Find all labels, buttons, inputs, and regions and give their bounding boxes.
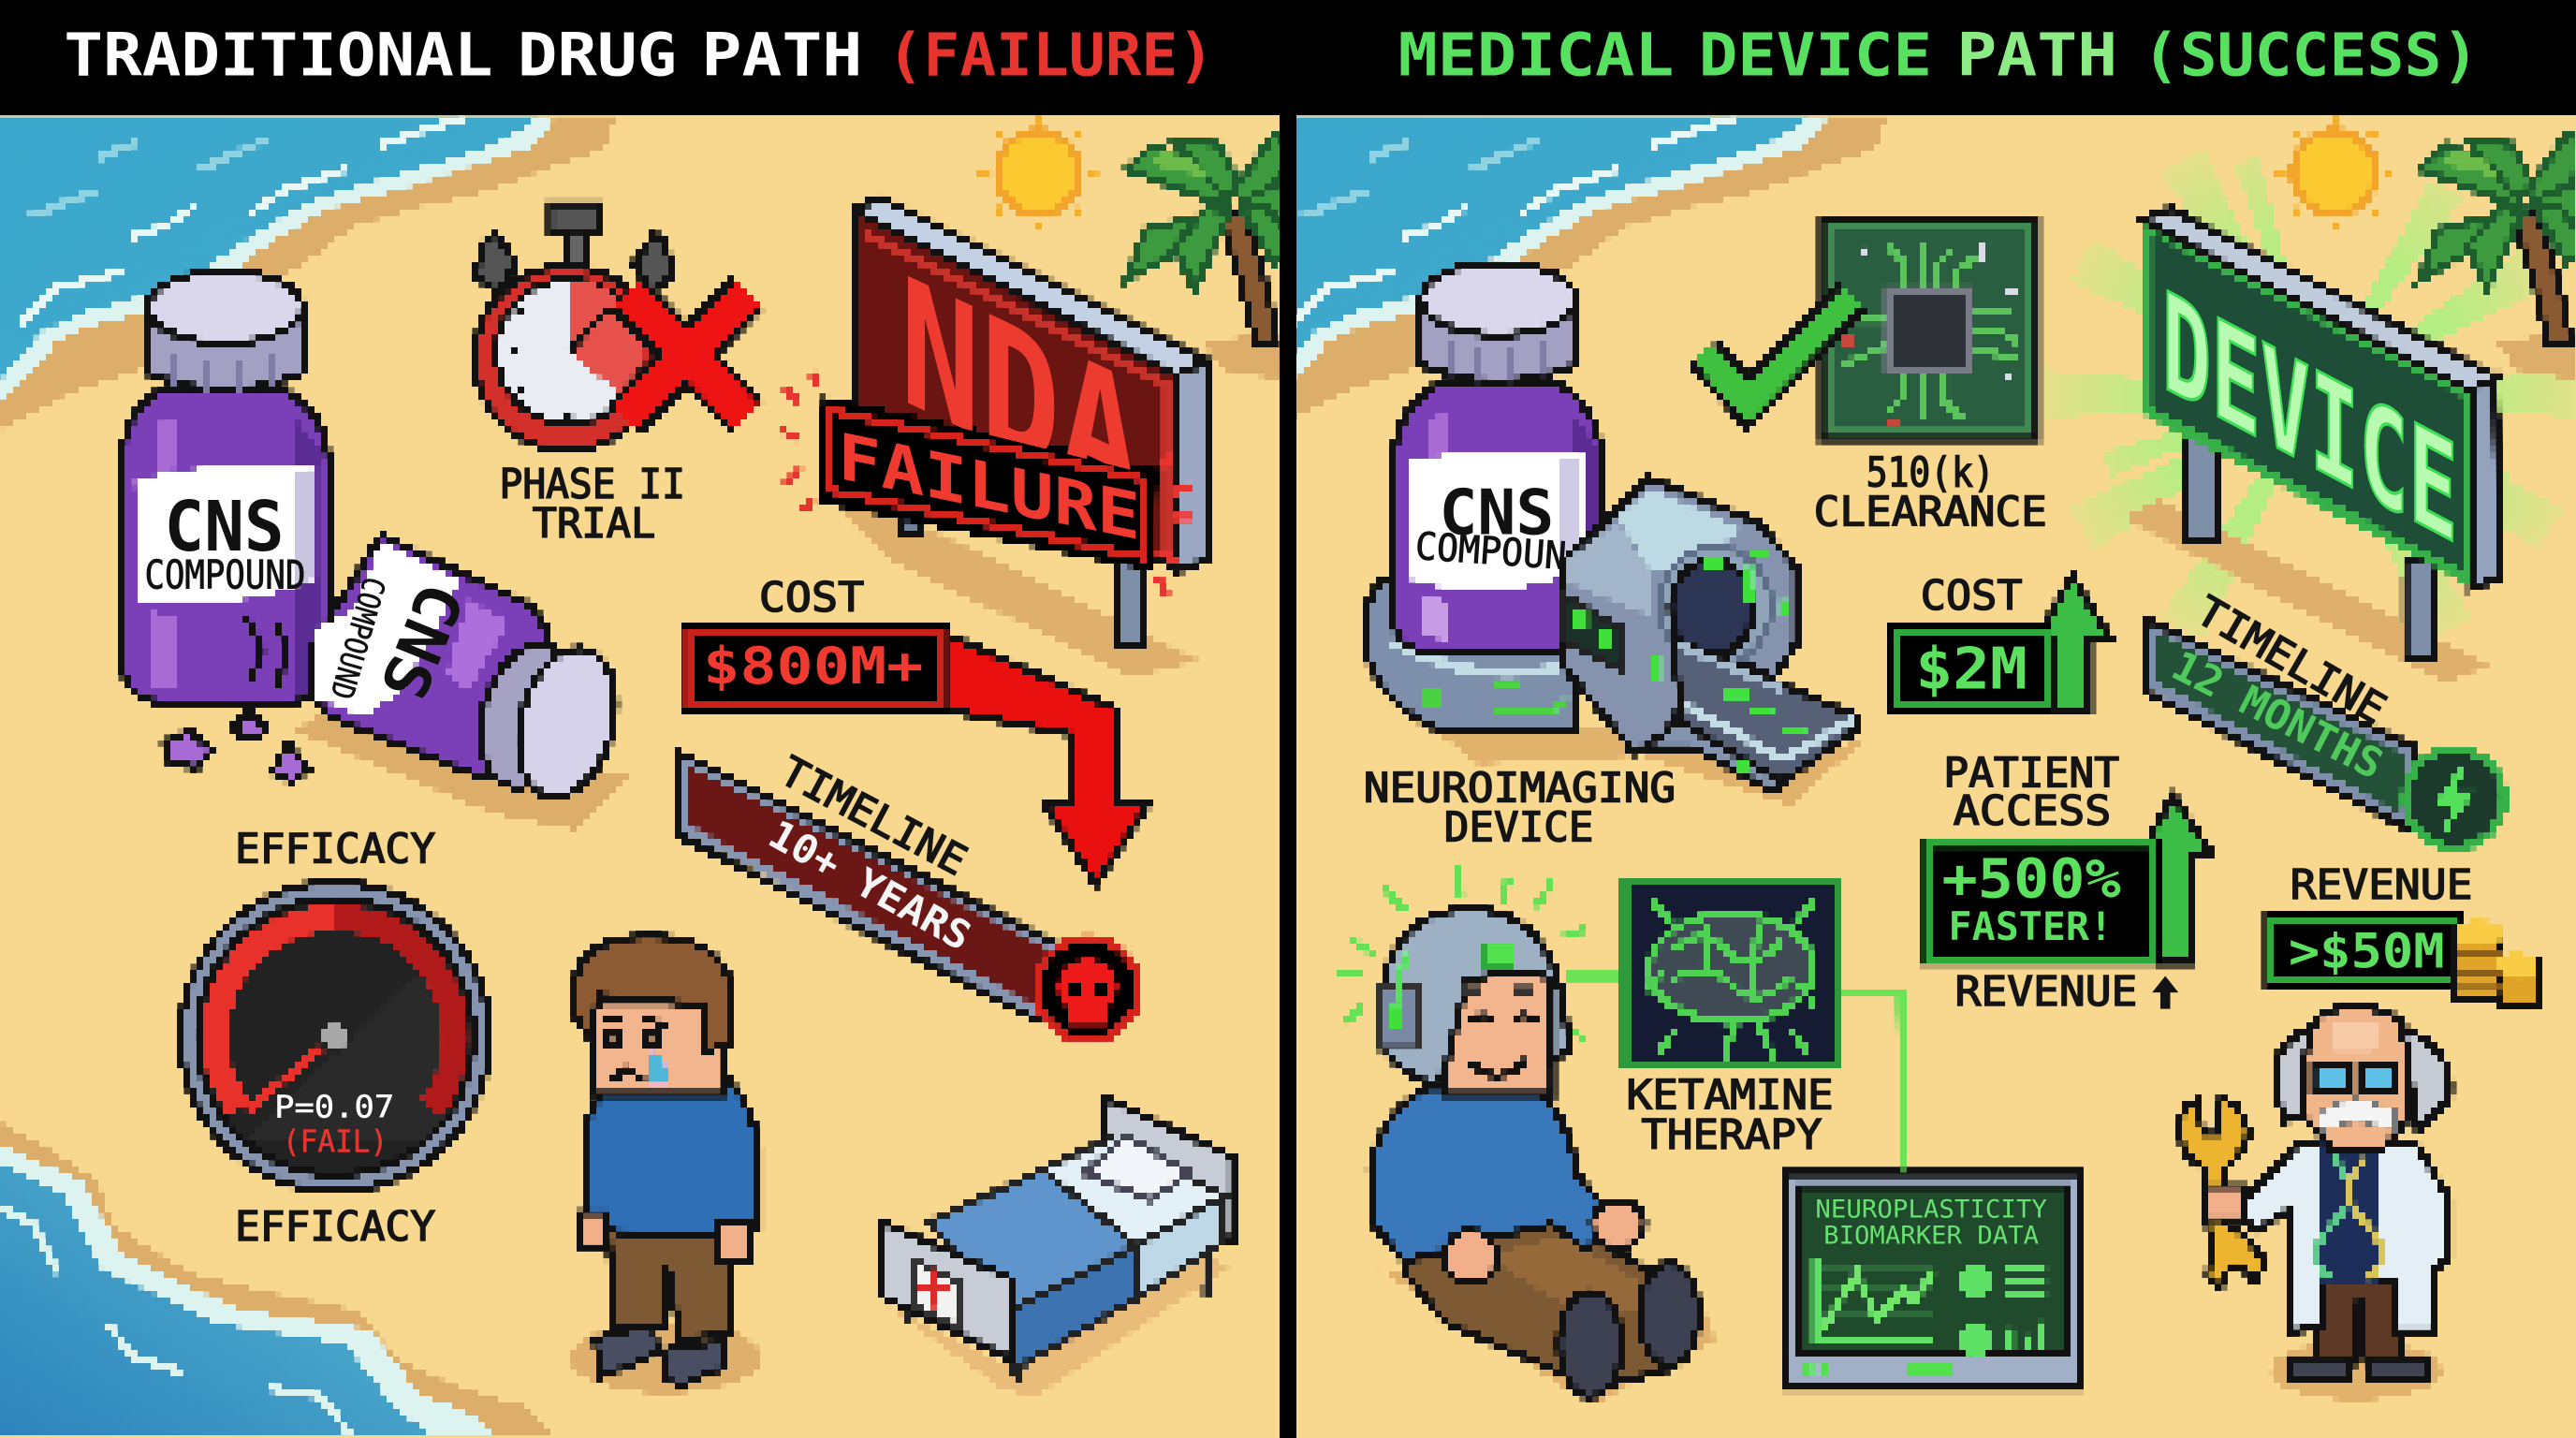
title: traditional drug path (failure): TRADITIONAL [64, 21, 493, 90]
icon: intact CNS bottle [122, 271, 329, 703]
icon: bottle on scanner base [1365, 263, 1865, 805]
value box: revenue [2264, 912, 2465, 990]
title: medical device path (success): PATH [1956, 21, 2117, 90]
title: medical device path (success) [1398, 21, 2479, 90]
label: neuroplasticity biomarker data: BIOMARKER DATA [1823, 1223, 2039, 1251]
value: +500% faster: FASTER! [1949, 903, 2113, 949]
label: bottle CNS COMPOUND: COMPOUN [1413, 524, 1568, 579]
label: neuroplasticity biomarker data: NEUROPLASTICITY [1815, 1196, 2047, 1225]
label: NDA on billboard: NDA [900, 239, 1140, 553]
gauge: efficacy [181, 882, 490, 1191]
figure: sad patient [570, 936, 761, 1393]
value: +500% faster: +500% [1942, 846, 2121, 910]
value: $800M+: $800M+ [703, 637, 923, 696]
value box: +500% faster [1919, 795, 2211, 966]
value: P=0.07: P=0.07 [274, 1088, 394, 1124]
timeline bar with skull [677, 753, 1138, 1040]
value: 10+ years: 10+ YEARS [761, 811, 979, 960]
panel: traditional drug path [0, 113, 1314, 1438]
label: revenue up: REVENUE [1955, 968, 2137, 1016]
label: bottle CNS COMPOUND: COMPOUND [144, 551, 305, 597]
icon: NDA failure billboard [782, 198, 1209, 677]
label: cost: COST [1921, 572, 2023, 620]
icon: palm tree [2420, 135, 2576, 386]
icon: sun [979, 113, 1097, 231]
label: bottle CNS COMPOUND: CNS [165, 488, 285, 567]
label: timeline: TIMELINE [2188, 587, 2394, 734]
label: ketamine therapy: KETAMINE [1627, 1072, 1834, 1120]
label: 510(k) clearance [1814, 449, 2047, 536]
green glow rays [2045, 148, 2576, 640]
value: >$50M: >$50M [2289, 925, 2445, 980]
icon: coins [2454, 920, 2539, 1004]
title: traditional drug path (failure): DRUG [518, 21, 677, 90]
figure: scientist with wrench [2178, 1006, 2451, 1400]
label: timeline: TIMELINE [772, 747, 974, 886]
icon: small up arrow [2152, 976, 2178, 1009]
icon: brain scan panel [1625, 882, 1838, 1066]
label: bottle CNS COMPOUND: CNS [1439, 476, 1554, 549]
title: traditional drug path (failure): (FAILURE) [887, 21, 1214, 90]
label: bottle CNS COMPOUND [144, 488, 305, 597]
label: neuroimaging device: DEVICE [1444, 804, 1593, 852]
icon: circuit board with check [1704, 222, 2037, 439]
title: medical device path (success): DEVICE [1699, 21, 1932, 90]
label: fallen bottle CNS COMPOUND: CNS [366, 573, 477, 710]
label: patient access: ACCESS [1954, 787, 2111, 835]
label: neuroimaging device [1364, 764, 1676, 852]
label: neuroimaging device: NEUROIMAGING [1364, 764, 1676, 812]
labels: right panel [1364, 262, 2472, 1251]
value: +500% faster [1942, 846, 2121, 949]
label: bottle CNS COMPOUND [1413, 476, 1568, 579]
label: FAILURE: FAILURE [838, 419, 1140, 555]
label: efficacy top: EFFICACY [235, 825, 435, 873]
title: medical device path (success): (SUCCESS) [2143, 21, 2479, 90]
label: PHASE II TRIAL: TRIAL [533, 500, 655, 548]
panel: medical device path [1271, 113, 2576, 1438]
icon: sun [2276, 113, 2393, 231]
icon: happy patient with neuro helmet [1339, 862, 1715, 1405]
beach water top-left [1271, 115, 1888, 431]
label: patient access: PATIENT [1943, 750, 2119, 798]
label: efficacy bottom: EFFICACY [235, 1203, 435, 1251]
icon: scanner [1562, 478, 1858, 792]
label: ketamine therapy [1627, 1072, 1834, 1159]
label: ketamine therapy: THERAPY [1641, 1111, 1822, 1159]
label: 510(k) clearance: CLEARANCE [1814, 489, 2047, 536]
icon: broken fallen bottle [165, 536, 633, 829]
label: PHASE II TRIAL: PHASE II [500, 461, 685, 508]
connector lines [1567, 976, 1904, 1170]
beach water bottom-left [0, 1123, 567, 1438]
label: cost: COST [759, 574, 864, 622]
labels: left panel [144, 239, 1140, 1251]
icon: neuroplasticity data monitor [1786, 1173, 2080, 1388]
beach water top-left [0, 115, 616, 431]
icon: stopwatch with red X [475, 204, 748, 450]
title: medical device path (success): MEDICAL [1398, 21, 1674, 90]
label: fallen bottle CNS COMPOUND: COMPOUND [323, 573, 392, 703]
title: traditional drug path (failure) [64, 21, 1214, 90]
label: PHASE II TRIAL [500, 461, 685, 548]
value: $2M: $2M [1915, 636, 2027, 702]
value: 12 months: 12 MONTHS [2164, 642, 2391, 789]
icon: device billboard [2121, 209, 2499, 683]
label: neuroplasticity biomarker data [1815, 1196, 2047, 1251]
label: fallen bottle CNS COMPOUND [323, 573, 477, 710]
title: traditional drug path (failure): PATH [701, 21, 862, 90]
icon: cost box with up arrow [1889, 575, 2110, 713]
icon: palm tree [1127, 135, 1314, 386]
label: 510(k) clearance: 510(k) [1866, 449, 1995, 497]
value: (FAIL): (FAIL) [283, 1123, 388, 1159]
timeline bar with lightning [2145, 620, 2504, 848]
icon: cost down arrow [681, 624, 1150, 884]
icon: hospital bed [882, 1097, 1232, 1397]
label: patient access [1943, 750, 2119, 835]
label: revenue: REVENUE [2291, 861, 2472, 909]
